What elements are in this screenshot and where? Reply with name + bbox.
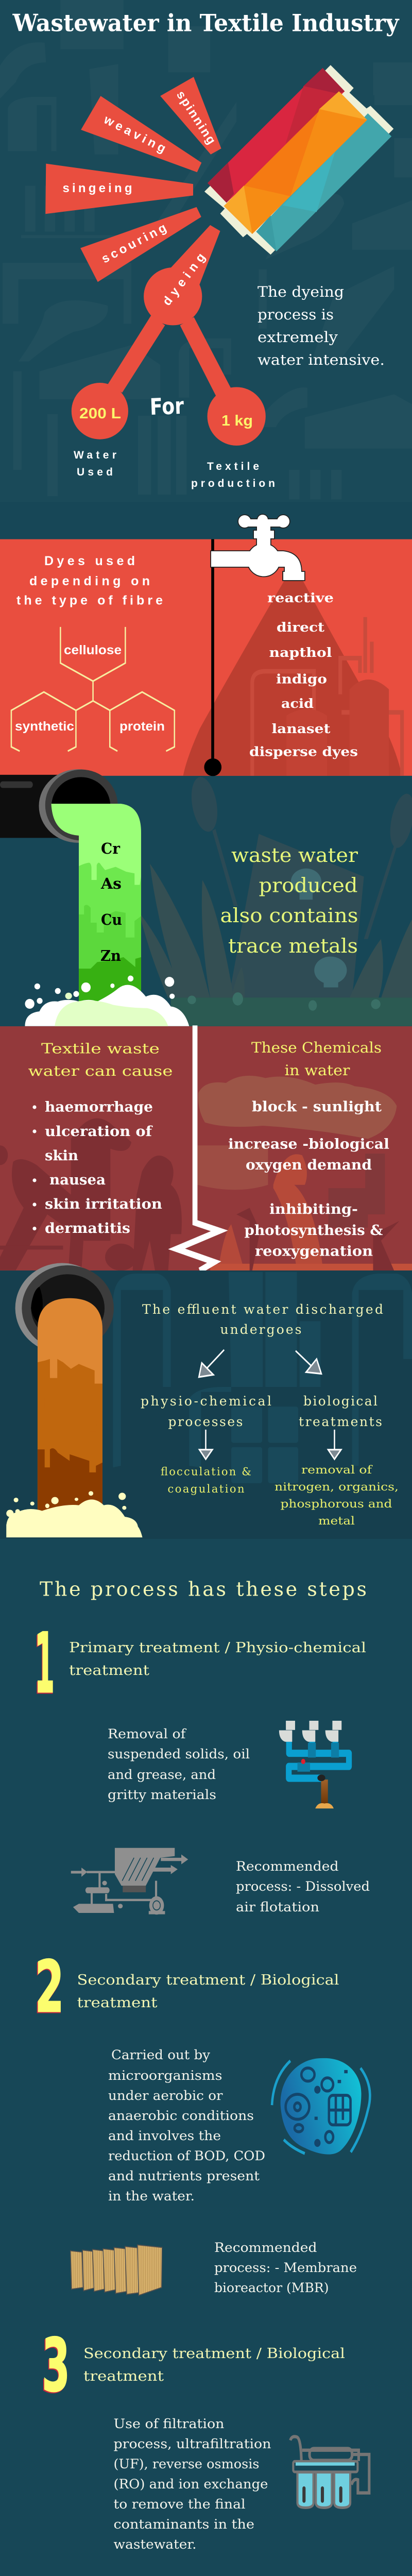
text: step 1 description: Removal of [108, 1726, 186, 1741]
labels: trace metal symbols: Cu [101, 911, 122, 928]
list: chemical effects: increase -biological [228, 1137, 389, 1153]
heading: dyes by fibre: Dyes used [44, 554, 135, 568]
heading: textile waste water [28, 1041, 173, 1079]
stat: 200 L water for 1 kg textile: Water [74, 449, 116, 461]
text: recommended dissolved air flotation [236, 1859, 370, 1914]
list: chemical effects: photosynthesis & [244, 1223, 383, 1239]
icon: microorganism cell [272, 2058, 370, 2155]
text: treatment outcomes [161, 1464, 399, 1527]
list: dye types [249, 590, 358, 759]
stat: 200 L water for 1 kg textile: 1 kg [221, 413, 253, 429]
text: trace metals: also contains [220, 904, 358, 927]
panel: trace metals background [139, 774, 412, 1026]
list: chemical effects: reoxygenation [255, 1244, 373, 1259]
panel: dyes [0, 539, 412, 776]
list: chemical effects [228, 1099, 389, 1259]
text: step 3 description: contaminants in the [113, 2517, 254, 2532]
list: dye types: lanaset [272, 721, 331, 736]
list: health effects: dermatitis [45, 1221, 130, 1236]
ribbon labels: dyeing [160, 250, 208, 308]
text: step 1 description: suspended solids, oil [108, 1747, 250, 1761]
text: trace metals: produced [259, 874, 357, 896]
text: treatment outcomes: phosphorous and [280, 1498, 392, 1510]
list: health effects: ulceration of [45, 1124, 153, 1140]
text: step 1 description: gritty materials [108, 1787, 216, 1802]
text: trace metals [220, 844, 358, 957]
step 2 heading: Secondary treatment / Biological [77, 1972, 339, 1988]
text: step 2 description: and nutrients present [108, 2168, 260, 2183]
arrow: to removal [328, 1430, 341, 1459]
text: step 2 description [108, 2047, 265, 2204]
heading: chemicals in water: in water [284, 1062, 350, 1079]
list: chemical effects: inhibiting- [269, 1201, 358, 1217]
number 1 [33, 1615, 55, 1713]
diagram: fibre hexagons: protein [119, 719, 165, 734]
text: treatment branches: physio-chemical [141, 1394, 271, 1409]
text: recommended membrane bioreactor: process: - Membrane [214, 2260, 357, 2275]
icon: green waste water pipe [0, 769, 141, 1002]
pole [204, 539, 221, 776]
text: dyeing is water intensive: extremely [258, 329, 338, 346]
text: step 3 description: wastewater. [113, 2537, 197, 2552]
step 3 heading [83, 2346, 345, 2384]
text: dyeing is water intensive: water intensive. [258, 351, 385, 368]
ribbon shapes [45, 77, 266, 446]
arrow: to flocculation [199, 1430, 212, 1459]
text: treatment outcomes: flocculation & [161, 1466, 251, 1478]
ribbon labels: weaving [101, 112, 168, 156]
list: health effects [32, 1099, 162, 1236]
heading: effluent water [142, 1302, 383, 1337]
text: step 3 description: process, ultrafiltration [113, 2436, 271, 2451]
step 1 heading: treatment [69, 1663, 149, 1679]
water cone with tanks [183, 579, 402, 776]
heading: chemicals in water: These Chemicals [251, 1039, 382, 1056]
number 2: 2 [34, 1947, 64, 2029]
text: treatment outcomes: coagulation [168, 1483, 244, 1495]
text: 1 [33, 1616, 55, 1713]
ribbon labels: scouring [99, 221, 169, 266]
text: treatment branches: treatments [299, 1414, 382, 1429]
text: recommended membrane bioreactor: bioreactor (MBR) [214, 2280, 329, 2295]
text: step 2 description: and involves the [108, 2128, 221, 2143]
title: Wastewater in Textile Industry [12, 9, 400, 37]
list: health effects: nausea [49, 1172, 106, 1188]
text: step 2 description: under aerobic or [108, 2088, 223, 2103]
image: membrane bioreactor panels [71, 2245, 162, 2295]
number 3: 3 [42, 2324, 70, 2408]
icon: water filter [290, 2436, 369, 2507]
labels: trace metal symbols: Cr [101, 840, 121, 857]
text: trace metals: trace metals [228, 935, 358, 957]
diagram: fibre hexagons [11, 627, 175, 751]
stat: 200 L water for 1 kg textile: production [191, 478, 275, 489]
arrow: to biological [296, 1351, 321, 1374]
labels: trace metal symbols [100, 840, 122, 964]
panel: health and chemical effects [0, 1026, 412, 1270]
text: step 3 description: Use of filtration [113, 2416, 225, 2431]
step 2 heading: treatment [77, 1995, 158, 2011]
text: step 2 description: in the water. [108, 2189, 195, 2204]
step 2 heading [77, 1972, 339, 2011]
text: step 2 description: Carried out by [111, 2047, 211, 2062]
text: recommended dissolved air flotation: process: - Dissolved [236, 1879, 370, 1894]
heading: effluent water: The effluent water discharged [142, 1302, 383, 1317]
heading: process steps: The process has these steps [40, 1578, 367, 1601]
text: step 2 description: anaerobic conditions [108, 2108, 254, 2123]
heading: dyes by fibre [16, 554, 163, 608]
heading: chemicals in water [251, 1039, 382, 1079]
stat: 200 L water for 1 kg textile [74, 393, 275, 489]
heading: textile waste water: water can cause [28, 1063, 173, 1079]
text: recommended dissolved air flotation: Recommended [236, 1859, 339, 1874]
number 2: 2 [35, 1946, 64, 2028]
text: step 2 description: reduction of BOD, COD [108, 2148, 265, 2163]
factory background pattern [0, 0, 412, 499]
labels: trace metal symbols: Zn [100, 947, 121, 964]
step 1 heading: Primary treatment / Physio-chemical [69, 1640, 366, 1656]
labels: trace metal symbols: As [100, 875, 122, 892]
icon: white tap [211, 515, 304, 580]
text: step 2 description: microorganisms [108, 2068, 222, 2083]
number 2 [34, 1946, 64, 2029]
step 1 heading [69, 1640, 366, 1679]
stat: 200 L water for 1 kg textile: Used [77, 466, 113, 478]
pipework background [113, 1272, 412, 1483]
list: dye types: indigo [276, 672, 327, 686]
text: step 1 description: and grease, and [108, 1767, 216, 1782]
icon: cream foam [6, 1491, 143, 1537]
text: step 1 description [108, 1726, 250, 1802]
text: treatment branches: processes [168, 1414, 243, 1429]
stat: 200 L water for 1 kg textile: 200 L [79, 405, 121, 422]
heading: effluent water: undergoes [220, 1322, 302, 1337]
arrow: to physio-chemical [199, 1350, 224, 1377]
text: dyeing is water intensive: process is [258, 306, 334, 323]
text: treatment branches: biological [303, 1394, 377, 1409]
number 3 [41, 2324, 70, 2409]
list: dye types: acid [281, 696, 314, 711]
icon: foam [25, 976, 189, 1026]
ribbon labels: singeing [63, 181, 132, 195]
diagram: fibre hexagons: synthetic [15, 719, 74, 734]
list: chemical effects: block - sunlight [252, 1099, 382, 1115]
list: chemical effects: oxygen demand [246, 1157, 372, 1173]
list: dye types: direct [277, 620, 325, 635]
list: health effects: haemorrhage [45, 1099, 153, 1115]
divider: zigzag [177, 1025, 219, 1270]
ribbon labels [63, 88, 218, 308]
text: treatment branches [141, 1394, 382, 1429]
text: step 3 description [113, 2416, 271, 2552]
list: dye types: napthol [269, 645, 332, 660]
heading: textile waste water: Textile waste [41, 1041, 160, 1057]
text: recommended membrane bioreactor: Recommended [214, 2240, 317, 2255]
text: trace metals: waste water [231, 844, 358, 867]
stat: 200 L water for 1 kg textile: Textile [207, 461, 259, 472]
step 3 heading: treatment [83, 2368, 164, 2384]
list: health effects: skin irritation [45, 1196, 162, 1212]
diagram: fibre hexagons: cellulose [64, 643, 122, 657]
text: step 3 description: to remove the final [113, 2497, 245, 2512]
list: dye types: disperse dyes [249, 744, 358, 759]
text: dyeing is water intensive [258, 283, 385, 368]
text: dyeing is water intensive: The dyeing [258, 283, 344, 300]
text: step 3 description: (RO) and ion exchange [113, 2477, 268, 2492]
background illustrations [0, 1076, 412, 1270]
text: treatment outcomes: metal [318, 1515, 355, 1527]
icon: fabric rolls [204, 65, 393, 255]
text: recommended dissolved air flotation: air flotation [236, 1900, 319, 1914]
step 3 heading: Secondary treatment / Biological [83, 2346, 345, 2362]
icon: toilets and pipes [279, 1721, 349, 1808]
heading: dyes by fibre: the type of fibre [16, 594, 163, 608]
list: dye types: reactive [267, 590, 334, 605]
text: treatment outcomes: nitrogen, organics, [274, 1481, 399, 1493]
text: recommended membrane bioreactor [214, 2240, 357, 2295]
icon: orange effluent pipe [15, 1263, 114, 1517]
panel: effluent treatment [0, 1270, 412, 1539]
ribbon labels: spinning [174, 88, 218, 147]
text: step 3 description: (UF), reverse osmosis [113, 2456, 260, 2471]
stat: 200 L water for 1 kg textile: For [149, 393, 184, 420]
number 3: 3 [41, 2325, 69, 2409]
panel: intro [0, 0, 412, 502]
list: health effects: skin [45, 1148, 78, 1164]
heading: dyes by fibre: depending on [29, 574, 150, 588]
text: treatment outcomes: removal of [301, 1464, 373, 1476]
diagram: process ribbons [45, 77, 266, 446]
text: 1 [35, 1615, 55, 1711]
diagram: dissolved air flotation [71, 1848, 188, 1914]
